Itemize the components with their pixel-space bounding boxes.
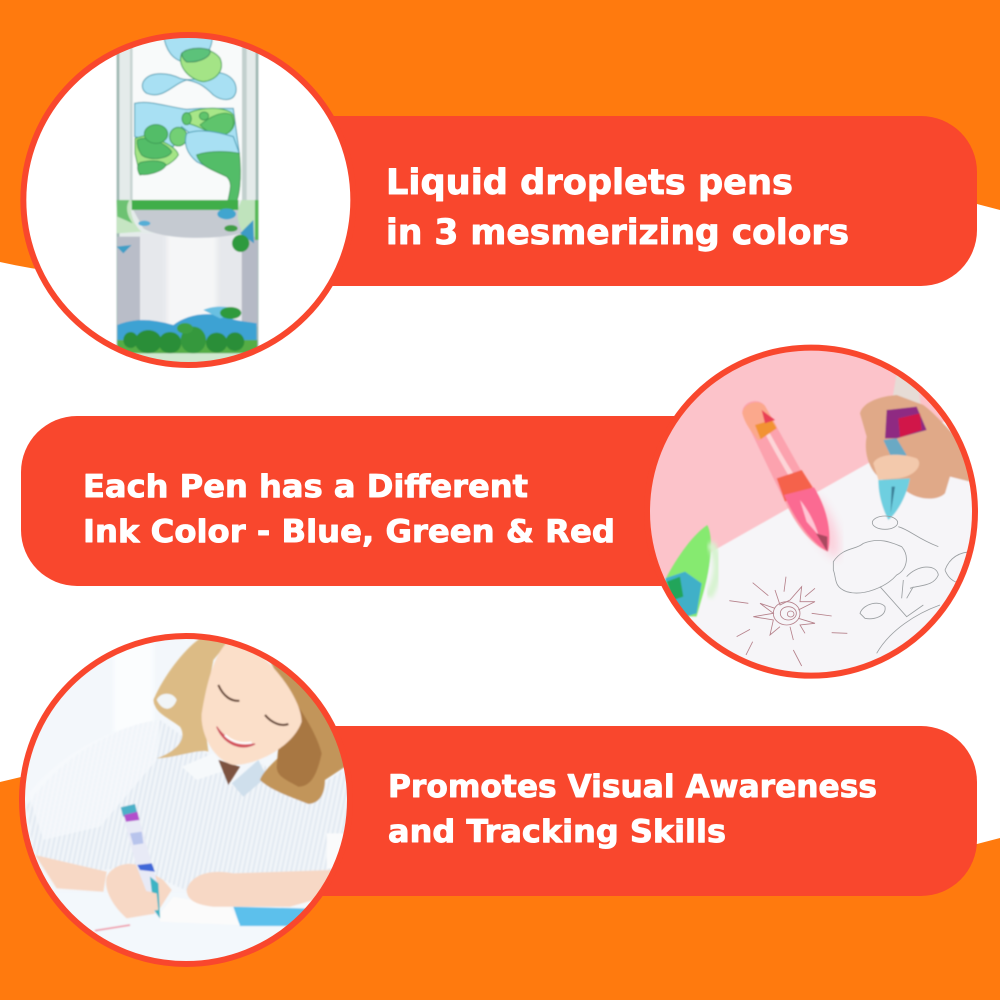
drawing paper: [664, 421, 972, 673]
hand holding blue pen: [860, 373, 977, 520]
liquid pen in hand: [121, 804, 160, 918]
background: top orange shape: [0, 0, 1000, 278]
pink pen: [742, 401, 830, 552]
settled droplets: [117, 307, 257, 370]
text: banner 2: Ink Color - Blue, Green & Red: [83, 514, 615, 550]
text: banner 1: [386, 163, 849, 253]
text: banner 2: Each Pen has a Different: [83, 469, 528, 505]
text: banner 3: [388, 769, 877, 850]
table and notebook: [94, 901, 306, 932]
green pen: [663, 525, 717, 618]
hair: [153, 638, 346, 804]
liquid droplets: [135, 33, 240, 207]
banner 2: [21, 416, 800, 586]
photo circle 1: liquid pen close-up: [23, 33, 353, 370]
photo circle 3: girl writing with liquid pen: [22, 636, 353, 973]
pencil doodles: [833, 516, 973, 653]
background: bottom orange shape: [0, 766, 1000, 1000]
sun doodle: [729, 577, 847, 666]
arms and hands: [35, 855, 333, 918]
text: banner 1: Liquid droplets pens: [386, 163, 793, 203]
shirt: [27, 720, 353, 897]
face: [202, 643, 302, 765]
text: banner 3: Promotes Visual Awareness: [388, 769, 877, 805]
photo circle 2: pens on drawing paper: [647, 348, 983, 683]
green oil layer: [117, 200, 258, 253]
tube body: [117, 33, 258, 370]
banner 1: [200, 116, 977, 286]
fingers over pen: [146, 890, 160, 912]
text: banner 3: and Tracking Skills: [388, 814, 726, 850]
banner 3: [200, 726, 977, 896]
eyes and smile: [217, 685, 288, 747]
text: banner 2: [83, 469, 615, 550]
text: banner 1: in 3 mesmerizing colors: [386, 213, 849, 253]
window background: [122, 700, 154, 728]
